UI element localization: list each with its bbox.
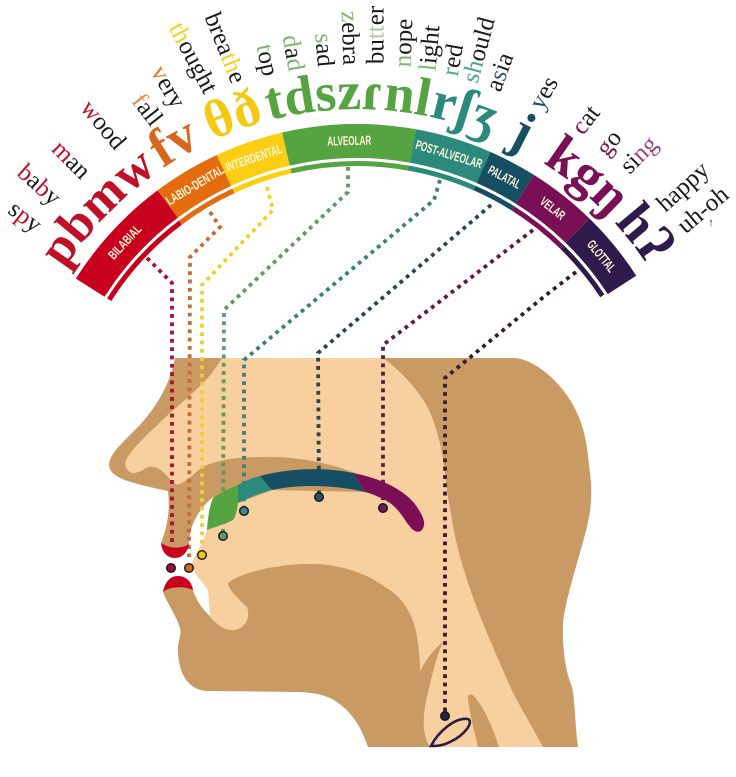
- point: interdental: [198, 551, 206, 559]
- thin arc: interdental: [233, 171, 291, 191]
- thin arc: alveolar: [291, 164, 408, 171]
- symbols: glottal: hʔ: [615, 199, 674, 262]
- word: sing: sing: [615, 130, 664, 179]
- palate bone: [178, 457, 365, 503]
- word: sad: sad: [309, 32, 339, 68]
- label: interdental: INTERDENTAL: [224, 141, 284, 174]
- nasal, oral and throat cavity: [125, 358, 543, 747]
- word: light: light: [415, 24, 445, 72]
- band: velar: [525, 189, 578, 231]
- band: glottal: [578, 231, 622, 285]
- word: butter: butter: [362, 5, 390, 64]
- word: zebra: z ebra: [336, 10, 364, 66]
- symbols: palatal: j: [502, 114, 536, 156]
- thin arc: glottal: [562, 247, 602, 296]
- band labels: [105, 133, 619, 275]
- word: happy: happy: [651, 156, 715, 217]
- band: post-alveolar: [413, 146, 484, 167]
- point: glottal: [441, 712, 449, 720]
- label: post-alveolar: POST-ALVEOLAR: [414, 137, 485, 171]
- word: breathe: breathe: [199, 9, 251, 87]
- symbols: labio-dental: fv: [149, 124, 192, 168]
- word: go: go: [591, 125, 627, 161]
- thin arc: bilabial: [109, 223, 180, 300]
- word: asia: asia: [481, 49, 519, 95]
- dotted connector: interdental: [202, 187, 273, 547]
- word: thought: thought: [163, 18, 223, 98]
- word: baby: baby: [12, 159, 66, 212]
- word: should: should: [457, 14, 501, 86]
- word: cat: cat: [566, 100, 606, 140]
- point: labio-dental: [185, 564, 193, 572]
- head silhouette: [109, 358, 591, 747]
- word: man: man: [46, 135, 96, 185]
- symbols: post-alveolar: rʃʒ: [430, 90, 498, 142]
- word: fall: fall: [126, 89, 168, 131]
- label: labio-dental: LABIO-DENTAL: [163, 162, 227, 208]
- lower lip: [163, 576, 193, 592]
- word: uh-oh: uh-oh: [672, 181, 734, 239]
- dotted connector: velar: [383, 230, 533, 505]
- head cross-section: [109, 358, 591, 747]
- articulation points: [167, 493, 449, 720]
- band: palatal: [484, 167, 525, 189]
- symbols: alveolar: tdszɾnl: [264, 74, 431, 118]
- band: bilabial: [90, 204, 168, 288]
- word: red: red: [437, 41, 469, 78]
- arrow under uh-oh: ↑: [708, 217, 714, 229]
- dotted connector: post-alveolar: [244, 180, 440, 507]
- dotted connector: glottal: [445, 272, 576, 712]
- phoneme symbols: [45, 74, 674, 274]
- palate zone: palatal: [260, 469, 365, 492]
- vocal folds: [431, 719, 470, 746]
- label: palatal: PALATAL: [486, 162, 524, 192]
- palate zone: post-alveolar: [238, 476, 272, 503]
- word: dad: dad: [277, 33, 310, 74]
- dotted connector: labio-dental: [189, 212, 220, 557]
- example words: [3, 5, 734, 239]
- upper lip: [161, 543, 189, 558]
- thin arc: palatal: [474, 188, 513, 208]
- dotted connector: alveolar: [223, 167, 348, 532]
- word: top: top: [250, 42, 284, 78]
- label: velar: VELAR: [537, 194, 569, 223]
- thin arc: post-alveolar: [408, 168, 474, 188]
- point: post-alveolar: [240, 507, 248, 515]
- word: very: very: [145, 61, 191, 113]
- palate zone: velar: [353, 473, 424, 532]
- label: bilabial: BILABIAL: [105, 221, 145, 262]
- label: alveolar: ALVEOLAR: [327, 133, 372, 149]
- symbols: interdental: θð: [204, 86, 260, 136]
- word: nope: nope: [390, 18, 418, 68]
- palate zone: alveolar: [207, 485, 238, 530]
- dotted connector: bilabial: [147, 258, 172, 542]
- thin arc: labio-dental: [180, 191, 233, 223]
- band: interdental: [224, 149, 286, 170]
- band: alveolar: [286, 141, 413, 149]
- symbols: bilabial: pbmw: [45, 152, 150, 274]
- word: yes: yes: [524, 72, 564, 114]
- point: bilabial: [167, 564, 175, 572]
- colour band arc: [90, 141, 622, 288]
- point: velar: [379, 504, 387, 512]
- band: labio-dental: [168, 170, 224, 204]
- palate colour zones: [207, 469, 424, 532]
- word: spy: spy: [3, 196, 47, 239]
- symbols: velar: kgŋ: [544, 132, 623, 220]
- dotted connector: palatal: [318, 205, 491, 493]
- point: alveolar: [219, 532, 227, 540]
- thin arc: velar: [513, 208, 562, 247]
- label: glottal: GLOTTAL: [584, 237, 619, 275]
- thin under-arc: [109, 164, 602, 300]
- point: palatal: [315, 493, 323, 501]
- word: wood: wood: [75, 95, 132, 155]
